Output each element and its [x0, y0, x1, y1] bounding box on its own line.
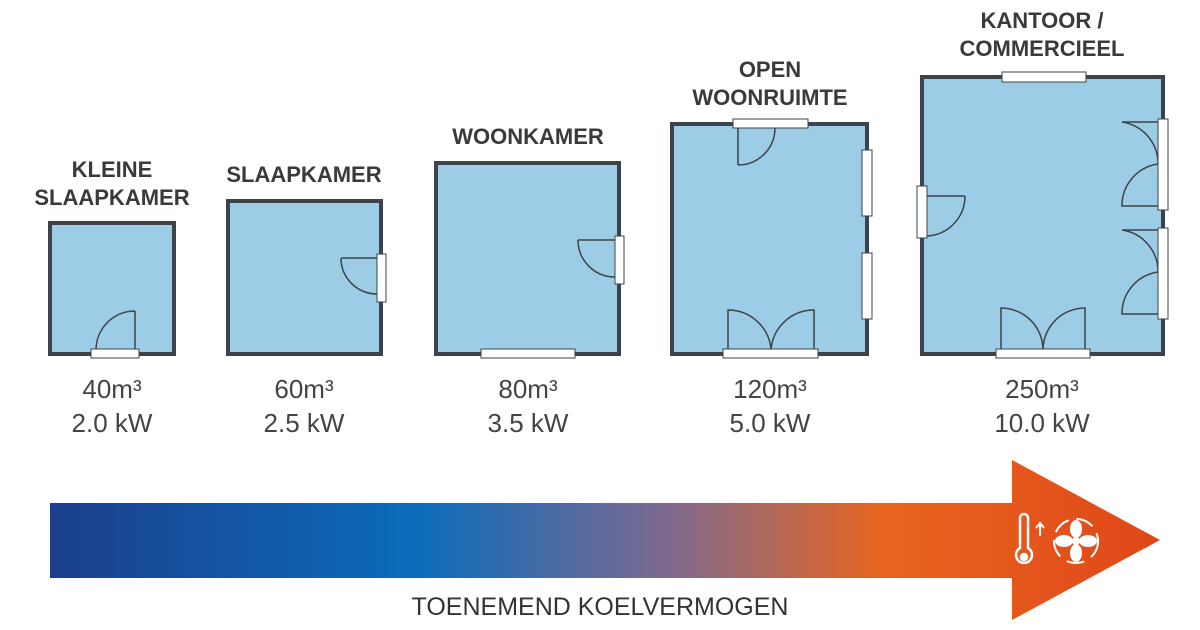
values: slaapkamer: 60m³ [274, 374, 334, 404]
room: slaapkamer [226, 162, 386, 438]
heading: open woonruimte: OPEN [739, 57, 801, 82]
values: woonkamer: 3.5 kW [488, 408, 569, 438]
values: kantoor / commercieel: 10.0 kW [994, 408, 1090, 438]
values: kleine slaapkamer: 40m³ [82, 374, 142, 404]
arrow: increasing cooling capacity [50, 460, 1160, 620]
values: woonkamer: 80m³ [498, 374, 558, 404]
values: open woonruimte: 5.0 kW [730, 408, 811, 438]
floor plan: slaapkamer [228, 201, 386, 354]
heading: woonkamer: WOONKAMER [452, 124, 604, 149]
heading: slaapkamer: SLAAPKAMER [226, 162, 382, 187]
room: open woonruimte [672, 57, 872, 438]
floor plan: woonkamer [436, 163, 624, 358]
room: kantoor / commercieel [917, 8, 1168, 438]
floor plan: kleine slaapkamer [50, 223, 174, 358]
heading: kantoor / commercieel: COMMERCIEEL [960, 36, 1124, 61]
values: kantoor / commercieel: 250m³ [1005, 374, 1079, 404]
values: kleine slaapkamer: 2.0 kW [72, 408, 153, 438]
floor plan: open woonruimte [672, 119, 872, 358]
icon: thermometer [1016, 514, 1044, 563]
room: kleine slaapkamer [34, 157, 190, 438]
heading: kleine slaapkamer: KLEINE [72, 157, 152, 182]
values: open woonruimte: 120m³ [733, 374, 807, 404]
icon: fan [1054, 519, 1098, 563]
heading: open woonruimte: WOONRUIMTE [692, 85, 848, 110]
values: slaapkamer: 2.5 kW [264, 408, 345, 438]
floor plan: kantoor / commercieel [917, 72, 1168, 358]
heading: kantoor / commercieel: KANTOOR / [980, 8, 1104, 33]
heading: kleine slaapkamer: SLAAPKAMER [34, 185, 190, 210]
caption: toenemend koelvermogen: TOENEMEND KOELVERMOGEN [412, 593, 788, 621]
room: woonkamer [436, 124, 624, 438]
